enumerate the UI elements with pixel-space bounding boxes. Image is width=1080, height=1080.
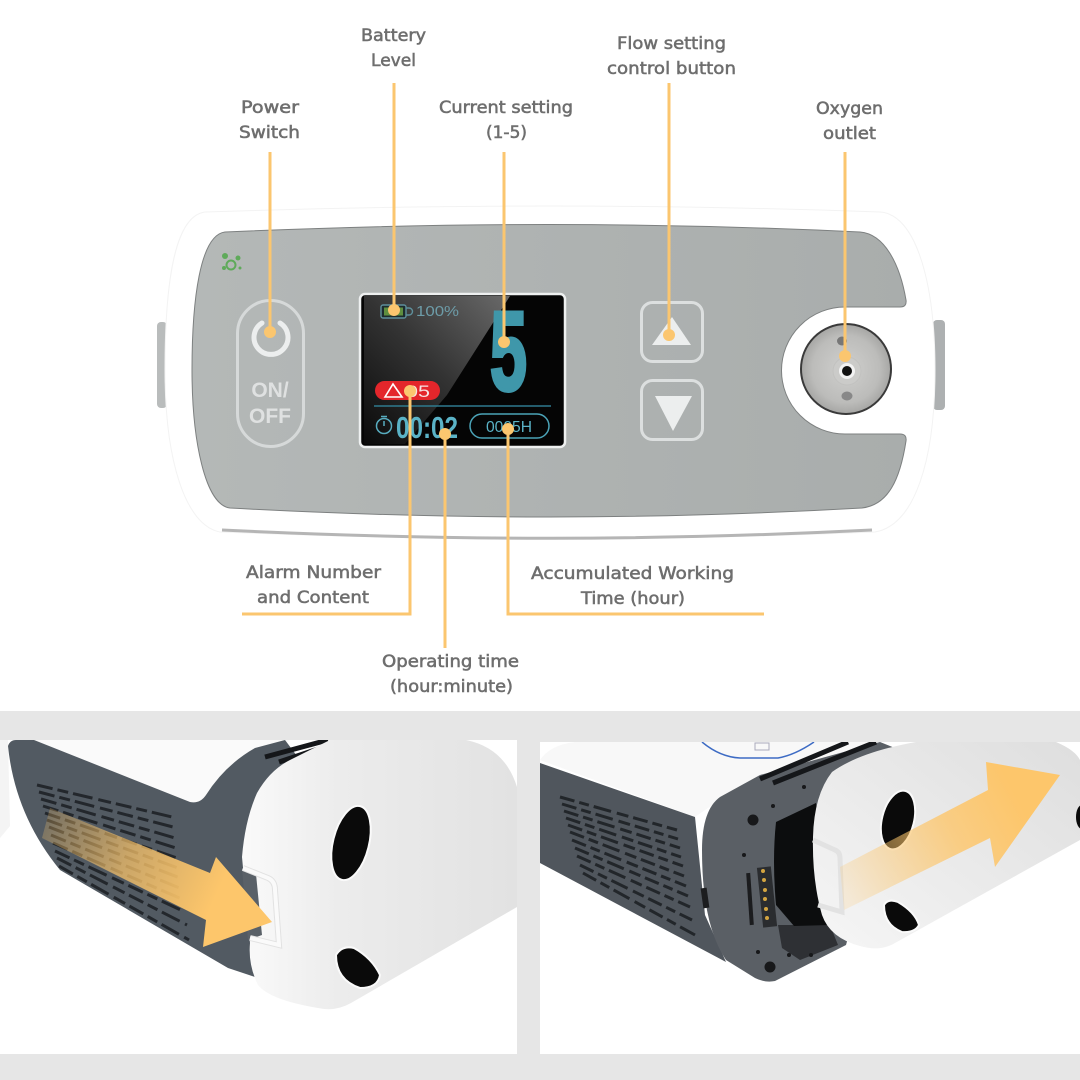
line: battery level (388, 83, 400, 316)
top vent slots (265, 740, 330, 762)
device white body (165, 206, 935, 539)
label: current setting: Current setting (439, 98, 573, 118)
screw holes (742, 785, 813, 972)
cap opening lower (884, 901, 919, 932)
callout lines (242, 83, 851, 648)
label: alarm number: Alarm Number (246, 563, 381, 583)
label: accumulated working time: Time (hour) (580, 589, 685, 609)
cap opening right edge (1076, 805, 1080, 829)
contact strip (746, 866, 777, 928)
icon: battery (381, 305, 413, 318)
icon: green logo (222, 253, 242, 270)
label: battery level: Battery (361, 26, 426, 46)
flow up button (642, 302, 702, 362)
battery cavity (774, 803, 830, 926)
label: operating time (382, 652, 519, 697)
arrow: slide out (840, 762, 1060, 910)
line: current setting (498, 152, 510, 348)
line: alarm number (242, 385, 416, 614)
label: battery level (361, 26, 426, 71)
line: power switch (264, 152, 276, 338)
power switch button (238, 300, 304, 446)
label: power switch: Power (241, 98, 299, 118)
white end cap (242, 740, 517, 1009)
dark end plate (702, 742, 900, 982)
on off label (249, 379, 291, 428)
label: oxygen outlet: Oxygen (816, 99, 883, 119)
label: flow setting (607, 34, 736, 79)
label: current setting: (1-5) (486, 123, 527, 143)
blue label outline (702, 742, 814, 758)
dark vented side (540, 763, 726, 962)
label: power switch: Switch (239, 123, 300, 143)
screen glare (364, 296, 510, 444)
arrow: slide in (42, 808, 272, 947)
label: power switch (239, 98, 300, 143)
icon: power symbol (254, 323, 288, 354)
device white top (30, 740, 290, 803)
cap opening upper (330, 805, 372, 881)
operating time readout: 00:02 (396, 410, 458, 445)
label marks (755, 743, 769, 750)
alarm badge (375, 381, 440, 401)
white end cap (813, 742, 1080, 948)
accumulated hours readout: 0005H (486, 419, 532, 436)
side vent slots (560, 797, 695, 935)
icon: timer (376, 416, 392, 434)
dark vented side (8, 740, 300, 978)
device side tabs (157, 320, 945, 410)
label: flow setting: Flow setting (617, 34, 726, 54)
label: alarm number (246, 563, 381, 608)
device front view (157, 206, 945, 539)
grey control panel (192, 224, 906, 517)
display screen (360, 289, 565, 447)
cap latch (243, 868, 279, 945)
flow down button (642, 380, 702, 440)
label: oxygen outlet (816, 99, 883, 144)
usb port (701, 888, 709, 908)
cap opening lower (336, 947, 380, 988)
label: flow setting: control button (607, 59, 736, 79)
screen divider (374, 405, 551, 407)
panel: opening battery cover (540, 742, 1080, 1054)
on off label: OFF (249, 405, 291, 428)
line: operating time (439, 428, 451, 648)
cap latch highlight (243, 868, 279, 945)
top vent slots (760, 742, 876, 783)
cap opening upper (880, 790, 916, 848)
label: operating time: (hour:minute) (390, 677, 513, 697)
label: current setting (439, 98, 573, 143)
latch recess (242, 868, 262, 940)
battery percent: 100% (416, 303, 459, 320)
alarm badge: 05 (406, 382, 430, 401)
device left strap (0, 740, 10, 838)
bottom grey band (0, 711, 1080, 1080)
device lower edge shadow (222, 530, 872, 538)
line: oxygen outlet (839, 152, 851, 362)
label: accumulated working time (531, 564, 734, 609)
oxygen outlet (801, 324, 891, 414)
line: flow setting (663, 83, 675, 341)
accumulated hours readout (470, 414, 549, 438)
label: battery level: Level (371, 51, 416, 71)
current setting digit: 5 (490, 289, 527, 414)
panel: closing battery cover (0, 740, 517, 1054)
device white top (540, 742, 880, 817)
line: accumulated time (502, 423, 764, 614)
label: oxygen outlet: outlet (823, 124, 876, 144)
lower cavity recess (778, 925, 838, 960)
label: alarm number: and Content (257, 588, 369, 608)
label: operating time: Operating time (382, 652, 519, 672)
label: accumulated working time: Accumulated Working (531, 564, 734, 584)
cap latch (813, 840, 842, 912)
side vent slots (37, 785, 189, 940)
on off label: ON/ (251, 379, 289, 402)
